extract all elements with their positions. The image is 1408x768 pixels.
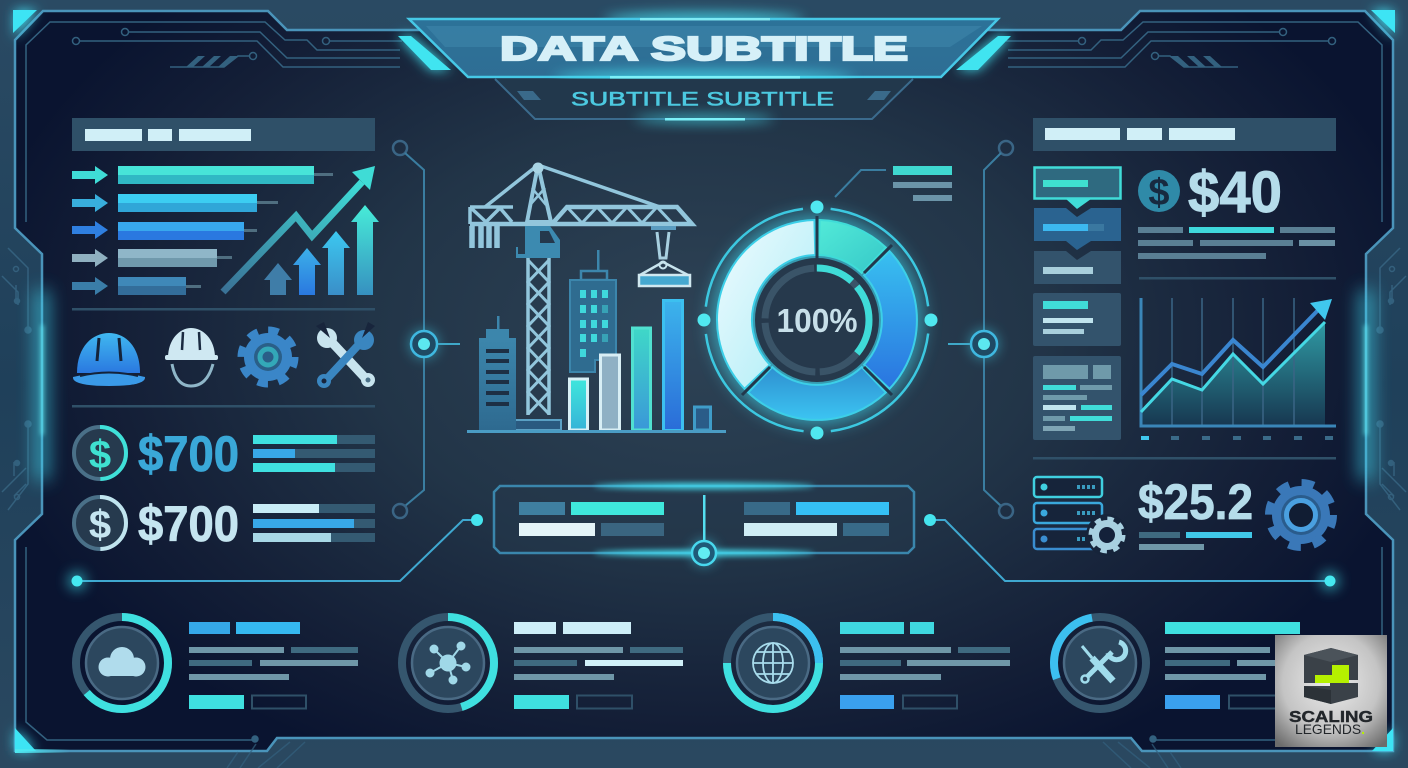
left connector [393, 141, 460, 518]
title text: DATA SUBTITLE [500, 30, 908, 67]
title banner [398, 12, 1011, 84]
stat row: $700 teal: $700 [138, 426, 239, 482]
middle building [570, 250, 616, 372]
bottom item: tools [1041, 604, 1326, 722]
right panel [1033, 118, 1336, 556]
left panel header [72, 118, 375, 151]
stat: $25.2: $25.2 [1138, 474, 1253, 530]
icon: wrench and screwdriver [1082, 642, 1126, 682]
icon: large gear [1270, 484, 1332, 546]
icon: crossed wrenches [316, 322, 375, 388]
bar chart columns [570, 300, 710, 430]
side circuit decoration [2, 248, 1406, 510]
horizontal bar chart with arrows [72, 166, 333, 295]
subtitle text: SUBTITLE SUBTITLE [571, 90, 834, 110]
center info box [494, 483, 914, 566]
crane [470, 162, 692, 430]
trend arrow and rising arrows [223, 166, 379, 295]
stat row: $700 white: $ [89, 503, 111, 547]
donut callout [835, 166, 952, 201]
gauge ring [727, 617, 819, 709]
stat: $40: $40 [1188, 160, 1282, 225]
logo text: SCALING [1289, 709, 1373, 726]
stat: $40: $ [1148, 172, 1170, 214]
bottom item: globe [727, 617, 1010, 709]
donut chart [698, 200, 938, 440]
right panel header [1033, 118, 1336, 151]
box node [691, 540, 717, 566]
icon: cloud [98, 647, 146, 676]
icon: network nodes [426, 642, 470, 684]
gauge ring [1041, 604, 1159, 722]
side accents [398, 36, 1011, 70]
bottom item: cloud [76, 617, 358, 709]
left panel [72, 118, 379, 552]
icon: servers with gear [1034, 477, 1128, 556]
construction illustration [467, 162, 726, 433]
gauge ring [402, 617, 494, 709]
stat row: $700 white: $700 [138, 496, 239, 552]
logo badge: LEGENDS. [1295, 721, 1365, 737]
icon: blue hard hat [73, 333, 145, 386]
right connector [948, 141, 1013, 518]
icon: gear [241, 330, 295, 384]
gauge ring [76, 617, 168, 709]
bottom connector right [924, 514, 1340, 591]
icon: white hard hat [165, 328, 218, 386]
bottom connector left [67, 514, 483, 591]
donut centre [755, 258, 879, 382]
logo mark [1304, 648, 1358, 704]
stat: $25.2 [1138, 474, 1253, 550]
stat row: $700 white [74, 496, 375, 552]
left building [479, 316, 516, 430]
subtitle plate [495, 79, 913, 123]
centre value: 100% [776, 302, 858, 339]
flow cards [1033, 168, 1121, 440]
bottom item: network [402, 617, 683, 709]
logo badge [1275, 635, 1387, 747]
stat row: $700 teal [74, 426, 375, 482]
donut segments [717, 216, 917, 420]
stat: $40 [1138, 160, 1335, 259]
outer ring [705, 208, 929, 432]
stat row: $700 teal: $ [89, 433, 111, 477]
icon: globe [753, 643, 793, 683]
line chart [1141, 298, 1336, 440]
